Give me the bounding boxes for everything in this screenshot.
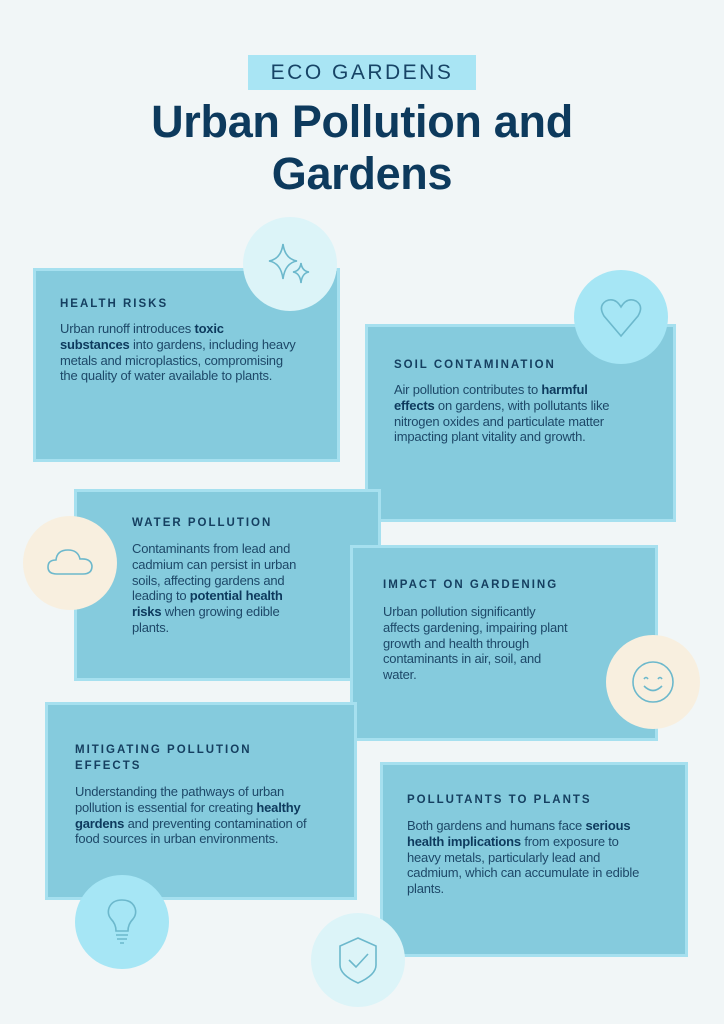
- text: health risks: [60, 321, 296, 383]
- text: pollutants to plants: cadmium, which can accumulate in edible: [407, 865, 639, 880]
- heading: health risks: HEALTH RISKS: [60, 298, 168, 310]
- icon: cloud: [23, 516, 117, 610]
- text: impact on gardening: contaminants in air, soil, and: [383, 651, 541, 666]
- text: mitigating pollution effects: Understanding the pathways of urban: [75, 784, 284, 799]
- panel: pollutants to plants: [380, 762, 688, 957]
- text: pollutants to plants: Both gardens and humans face serious: [407, 818, 630, 833]
- heading: pollutants to plants: POLLUTANTS TO PLANTS: [407, 794, 592, 806]
- icon: lightbulb: [75, 875, 169, 969]
- tag: eco gardens: ECO GARDENS: [271, 61, 453, 84]
- panel: health risks: [33, 268, 340, 462]
- text: pollutants to plants: health implications from exposure to: [407, 834, 619, 849]
- heading: mitigating pollution effects: MITIGATING POLLUTION EFFECTS: [75, 744, 252, 772]
- text: water pollution: cadmium can persist in urban: [132, 557, 296, 572]
- text: health risks: the quality of water available to plants.: [60, 368, 272, 383]
- title: [151, 96, 573, 199]
- text: water pollution: risks when growing edible: [132, 604, 280, 619]
- text: impact on gardening: affects gardening, impairing plant: [383, 620, 567, 635]
- text: soil contamination: impacting plant vitality and growth.: [394, 429, 586, 444]
- text: impact on gardening: [383, 604, 568, 682]
- text: water pollution: plants.: [132, 620, 169, 635]
- text: pollutants to plants: [407, 818, 639, 896]
- text: impact on gardening: growth and health through: [383, 636, 529, 651]
- icon: smiley: [606, 635, 700, 729]
- text: health risks: substances into gardens, including heavy: [60, 337, 296, 352]
- panel: soil contamination: [365, 324, 676, 522]
- text: water pollution: soils, affecting gardens and: [132, 573, 284, 588]
- heading: water pollution: WATER POLLUTION: [132, 517, 272, 529]
- text: mitigating pollution effects: food sources in urban environments.: [75, 831, 278, 846]
- panel: mitigating pollution effects: [45, 702, 357, 900]
- text: health risks: Urban runoff introduces toxic: [60, 321, 224, 336]
- icon: sparkles: [243, 217, 337, 311]
- text: pollutants to plants: heavy metals, particularly lead and: [407, 850, 600, 865]
- text: impact on gardening: water.: [383, 667, 416, 682]
- text: health risks: metals and microplastics, compromising: [60, 353, 283, 368]
- text: impact on gardening: Urban pollution significantly: [383, 604, 535, 619]
- icon: heart: [574, 270, 668, 364]
- panel: impact on gardening: [350, 545, 658, 741]
- heading: impact on gardening: IMPACT ON GARDENING: [383, 579, 558, 591]
- icon: shield check: [311, 913, 405, 1007]
- text: soil contamination: Air pollution contributes to harmful: [394, 382, 588, 397]
- heading: soil contamination: SOIL CONTAMINATION: [394, 359, 556, 371]
- text: mitigating pollution effects: gardens and preventing contamination of: [75, 816, 306, 831]
- title: Urban Pollution and: [151, 96, 573, 147]
- text: water pollution: leading to potential health: [132, 588, 283, 603]
- text: water pollution: [132, 541, 296, 635]
- text: mitigating pollution effects: [75, 784, 307, 846]
- text: soil contamination: [394, 382, 609, 444]
- text: water pollution: Contaminants from lead and: [132, 541, 290, 556]
- text: soil contamination: nitrogen oxides and particulate matter: [394, 414, 604, 429]
- text: mitigating pollution effects: pollution is essential for creating healthy: [75, 800, 301, 815]
- text: soil contamination: effects on gardens, with pollutants like: [394, 398, 609, 413]
- tag: eco gardens: [248, 55, 476, 90]
- title: Gardens: [272, 148, 452, 199]
- panel: water pollution: [74, 489, 381, 681]
- text: pollutants to plants: plants.: [407, 881, 444, 896]
